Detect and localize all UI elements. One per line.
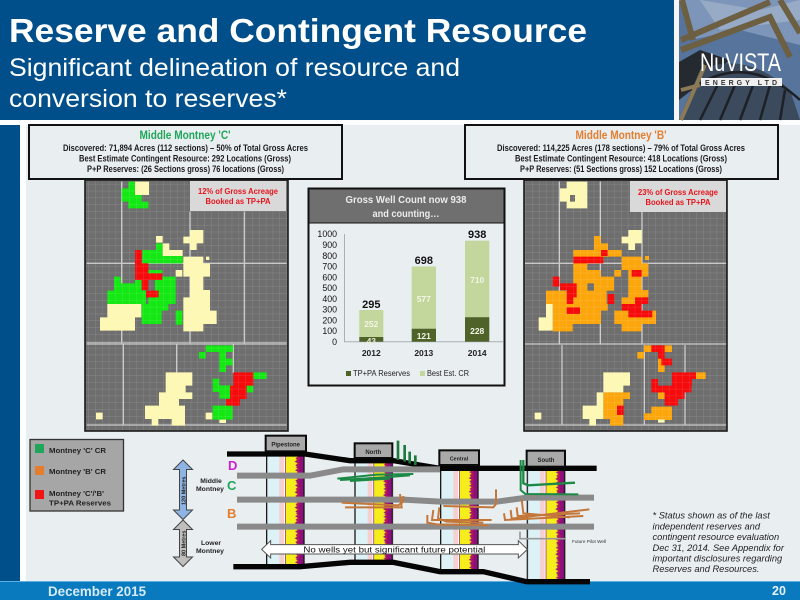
callout: 23% booked: Booked as TP+PA <box>646 197 710 207</box>
arrow: no wells yet <box>262 541 527 558</box>
tab: Pipestone <box>266 436 306 451</box>
panel: Middle Montney C info box: Middle Montney 'C' <box>140 130 231 142</box>
page number: 20 <box>772 584 786 598</box>
zone letters: C <box>227 478 237 493</box>
bars 2013: 577 <box>417 294 431 304</box>
footnote: independent reserves and <box>652 522 761 532</box>
gray marker bands <box>237 469 594 527</box>
x axis labels: 2014 <box>468 348 487 358</box>
bar chart: gross well count <box>308 188 504 386</box>
tab: Pipestone: Pipestone <box>271 443 301 449</box>
bars 2014 <box>465 229 489 342</box>
tab: South: South <box>538 458 555 464</box>
panel: Middle Montney C info box: Discovered: 71,894 Acres (112 sections) – 50% of Total Gross Acres <box>63 143 308 153</box>
callout: 12% booked: Booked as TP+PA <box>206 196 270 206</box>
chart heading: Gross Well Count now 938 <box>346 194 467 206</box>
bars 2013: 698 <box>415 255 433 267</box>
arrow: 120 metres thickness <box>174 460 192 520</box>
bars 2012: 43 <box>367 336 376 346</box>
map: Middle Montney C acreage <box>85 180 288 431</box>
bars 2013 <box>412 255 436 342</box>
callout: 12% booked: 12% of Gross Acreage <box>198 186 278 196</box>
tab: North <box>355 443 392 458</box>
tab: Central <box>439 450 479 465</box>
zone letters: B <box>227 506 236 521</box>
bars 2013: 121 <box>417 331 431 341</box>
footer date: December 2015 <box>48 584 146 599</box>
callout: 12% booked <box>190 181 286 211</box>
panel: Middle Montney B info box: Discovered: 114,225 Acres (178 sections) – 79% of Total Gross Acres <box>497 143 745 153</box>
label: Middle Montney: Middle <box>200 478 222 485</box>
chart heading: and counting… <box>372 208 440 220</box>
y axis labels: 800 <box>322 251 337 261</box>
panel: Middle Montney B info box: P+P Reserves: (51 Sections gross) 152 Locations (Gross) <box>520 164 722 174</box>
footer bar <box>0 581 800 600</box>
y axis labels: 400 <box>322 294 337 304</box>
y axis labels: 900 <box>322 240 337 250</box>
tab: Central: Central <box>450 457 469 463</box>
footnote: * Status shown as of the last <box>652 510 770 520</box>
left blue sidebar <box>0 125 26 581</box>
cross-section diagram <box>227 436 606 582</box>
label: Lower Montney <box>196 540 224 555</box>
footnote: important disclosures regarding <box>652 554 783 564</box>
panel: Middle Montney C info box <box>29 125 342 179</box>
future pilot well <box>520 532 606 544</box>
map: Middle Montney B acreage <box>524 180 727 431</box>
green wells <box>337 441 578 494</box>
footnote: Reserves and Resources. <box>652 564 759 574</box>
footnote: Dec 31, 2014. See Appendix for <box>652 543 785 553</box>
x axis labels: 2013 <box>414 348 434 358</box>
legend panel: Montney 'B' CR <box>49 467 107 476</box>
white gutter <box>0 120 800 125</box>
bars 2014: 938 <box>468 229 486 241</box>
panel: Middle Montney C info box: P+P Reserves: (26 Sections gross) 76 locations (Gross) <box>87 164 284 174</box>
zone letters <box>227 458 237 521</box>
orange wells <box>342 489 589 525</box>
y axis labels: 700 <box>322 262 337 272</box>
subtitle: Significant delineation of resource and <box>9 54 460 82</box>
panel: Middle Montney B info box: Best Estimate Contingent Resource: 418 Locations (Gross) <box>515 154 727 164</box>
bars 2014: 710 <box>470 275 485 285</box>
bars 2014: 228 <box>470 326 485 336</box>
arrow: 80 metres thickness <box>174 520 192 566</box>
future pilot well: Future Pilot Well <box>572 539 606 544</box>
header band <box>0 0 674 120</box>
tab: South <box>527 451 565 467</box>
chart heading <box>309 189 504 223</box>
legend panel: TP+PA Reserves <box>49 498 111 508</box>
panel: Middle Montney B info box: Middle Montney 'B' <box>576 130 667 142</box>
footnote <box>652 510 785 574</box>
bars 2012: 295 <box>362 299 380 311</box>
footnote: contingent resource evaluation <box>652 532 779 542</box>
bars 2012: 252 <box>364 319 379 329</box>
y axis labels: 600 <box>322 272 337 282</box>
chart legend: Best Est. CR <box>427 368 469 378</box>
arrow: 80 metres thickness: 80 Metres <box>182 531 188 556</box>
callout: 23% booked <box>630 181 726 212</box>
y axis labels: 100 <box>322 326 337 336</box>
label: Lower Montney: Lower <box>201 540 221 547</box>
x axis labels <box>362 348 487 358</box>
y axis labels: 0 <box>332 337 337 347</box>
chart legend <box>346 368 469 378</box>
logo wordmark: NuVISTA <box>700 49 781 77</box>
y axis labels: 500 <box>322 283 337 293</box>
subtitle: conversion to reserves* <box>9 85 287 113</box>
chart legend: TP+PA Reserves <box>353 368 410 378</box>
y axis labels: 200 <box>322 316 337 326</box>
y axis labels: 1000 <box>317 229 337 239</box>
title: Reserve and Contingent Resource <box>9 12 587 49</box>
bars 2012 <box>359 299 383 346</box>
well log columns <box>267 452 565 582</box>
legend panel: Montney 'C' CR <box>49 446 107 455</box>
y axis labels: 300 <box>322 304 337 314</box>
subtitle <box>9 54 460 113</box>
arrow: 120 metres thickness: 120 Metres <box>182 477 188 505</box>
label: Lower Montney: Montney <box>196 548 224 555</box>
zone letters: D <box>228 458 237 473</box>
logo subtitle strip: ENERGY LTD <box>705 80 777 87</box>
callout: 23% booked: 23% of Gross Acreage <box>638 187 718 197</box>
legend panel: Montney 'C'/'B' <box>49 489 104 498</box>
arrow: no wells yet: No wells yet but significant future potential <box>303 545 486 555</box>
panel: Middle Montney B info box <box>465 125 778 179</box>
y axis labels <box>317 229 337 347</box>
panel: Middle Montney C info box: Best Estimate Contingent Resource: 292 Locations (Gross) <box>79 154 291 164</box>
top and bottom formation lines <box>227 454 597 582</box>
tab: North: North <box>365 450 382 456</box>
legend panel <box>30 440 124 511</box>
label: Middle Montney: Montney <box>196 486 224 493</box>
logo panel <box>674 0 800 120</box>
x axis labels: 2012 <box>362 348 381 358</box>
label: Middle Montney <box>196 478 224 493</box>
